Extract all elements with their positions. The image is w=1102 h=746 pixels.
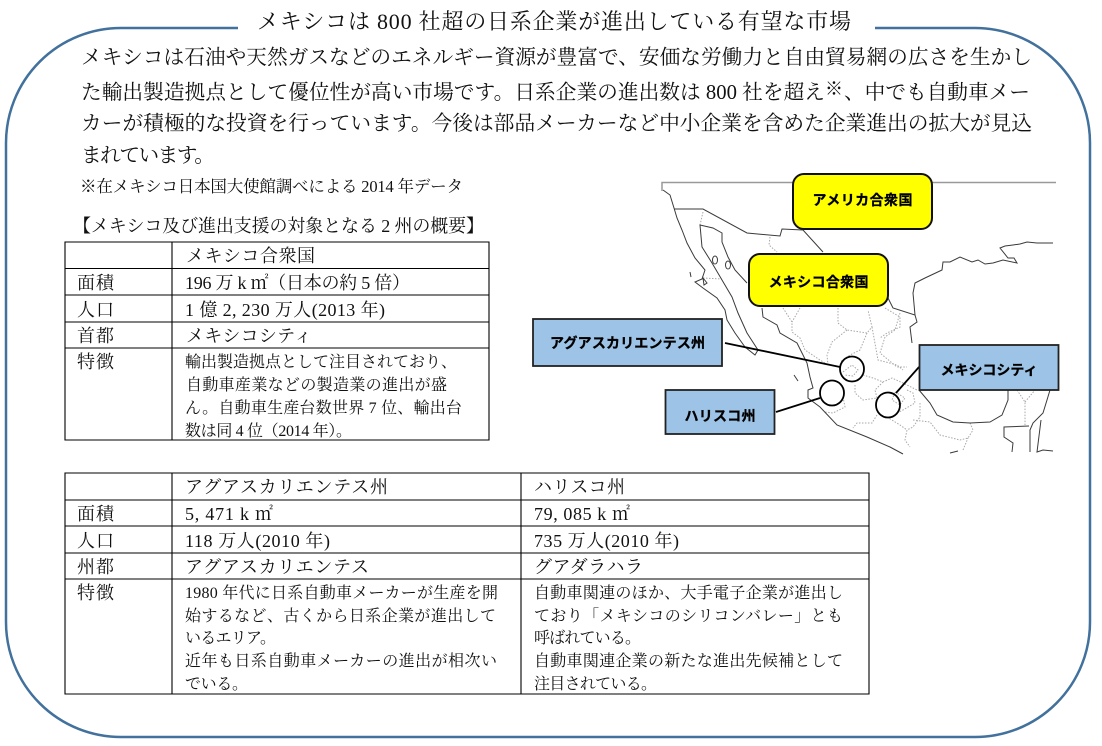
table: two states: 5, 471 k ㎡ [185,504,273,524]
label: Mexico City [920,345,1058,390]
intro text: カーが積極的な投資を行っています。今後は部品メーカーなど中小企業を含めた企業進出の拡大が見込 [81,112,1032,135]
intro text: まれています。 [81,145,215,167]
table: Mexico overview: メキシコシティ [186,326,312,346]
map of Mexico [662,182,1056,454]
table: two states: アグアスカリエンテス [185,557,369,577]
table: two states: 州都 [77,557,114,577]
table: two states: ており「メキシコのシリコンバレー」とも [534,607,843,625]
table: Mexico overview: 自動車産業などの製造業の進出が盛 [186,375,447,394]
footnote: ※在メキシコ日本国大使館調べによる 2014 年データ [80,176,463,196]
table: two states: 特徴 [77,583,114,603]
table: two states: 735 万人(2010 年) [534,530,679,552]
table: Mexico overview: 人口 [77,300,114,320]
label: Mexico [749,254,888,306]
label: United States: アメリカ合衆国 [812,192,912,208]
label: Aguascalientes: アグアスカリエンテス州 [550,335,705,351]
table: two states: 人口 [77,531,114,551]
table: two states: 始するなど、古くから日系企業が進出して [185,607,496,625]
label: Mexico: メキシコ合衆国 [768,274,868,290]
table: two states: 呼ばれている。 [534,629,641,647]
marker: Jalisco [776,380,844,412]
table: two states: 1980 年代に日系自動車メーカーが生産を開 [185,583,498,602]
table: two states: でいる。 [185,676,248,693]
table: Mexico overview: 1 億 2, 230 万人(2013 年) [185,299,385,321]
table: Mexico overview: 輸出製造拠点として注目されており、 [185,352,457,371]
table: two states: 近年も日系自動車メーカーの進出が相次い [185,651,497,670]
title: メキシコは 800 社超の日系企業が進出している有望な市場 [257,9,851,34]
intro text: 、中でも自動車メー [844,81,1030,104]
table: two states: アグアスカリエンテス州 [185,477,388,497]
table: Mexico overview: 数は同 4 位（2014 年）。 [185,421,352,440]
marker: Mexico City [876,367,919,418]
table: two states: 79, 085 k ㎡ [534,504,630,524]
table: two states: 自動車関連企業の新たな進出先候補として [534,651,843,670]
table: two states: いるエリア。 [185,630,276,647]
table: Mexico overview: 特徴 [77,352,114,372]
table: two states: 面積 [77,504,116,524]
table: Mexico overview: ん。自動車生産台数世界 7 位、輸出台 [185,398,462,417]
label: Jalisco [666,390,774,434]
table: Mexico overview: 196 万 k ㎡（日本の約 5 倍） [185,273,410,293]
table: two states: 注目されている。 [534,675,657,693]
table: two states: 118 万人(2010 年) [185,530,330,552]
intro text [81,46,1032,167]
intro text: ※ [825,79,843,99]
marker: Aguascalientes [725,343,864,382]
table: Mexico overview: メキシコ合衆国 [186,246,315,266]
label: Mexico City: メキシコシティ [940,362,1038,378]
label: Jalisco: ハリスコ州 [684,408,756,424]
table: Mexico overview: 面積 [77,273,116,293]
table: Mexico overview: 首都 [77,326,114,346]
label: Aguascalientes [533,319,722,366]
table: two states: ハリスコ州 [534,477,625,497]
table: two states: グアダラハラ [534,557,643,577]
table: two states: 自動車関連のほか、大手電子企業が進出し [534,583,843,602]
label: United States [793,174,932,229]
intro text: メキシコは石油や天然ガスなどのエネルギー資源が豊富で、安価な労働力と自由貿易網の広さを生かし [81,46,1032,69]
table heading: 【メキシコ及び進出支援の対象となる 2 州の概要】 [73,216,484,236]
table: Mexico overview [65,242,489,440]
table: two states [65,473,869,694]
intro text: た輸出製造拠点として優位性が高い市場です。日系企業の進出数は 800 社を超え [81,81,825,104]
